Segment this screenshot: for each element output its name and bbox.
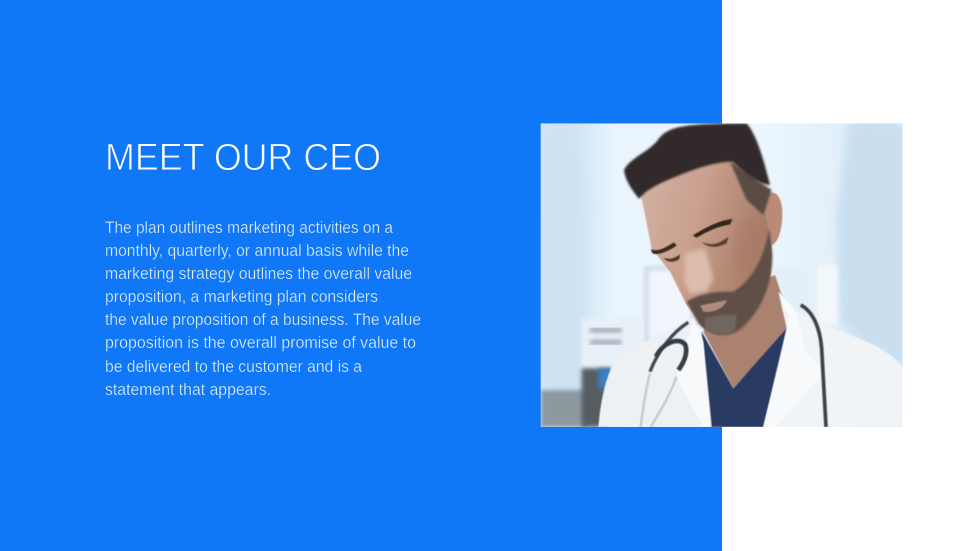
face: [640, 148, 772, 335]
panel: blue background: [0, 0, 722, 551]
lips: [700, 300, 727, 312]
text block: CEO description: monthly, quarterly, or annual basis while the: [105, 242, 409, 260]
chin hair: [705, 315, 737, 335]
text block: CEO description: [105, 219, 421, 399]
neck: [703, 275, 788, 388]
eyebrows and eyes: [651, 219, 733, 262]
lab coat: [598, 292, 903, 427]
text block: CEO description: proposition is the overall promise of value to: [105, 334, 416, 352]
photo background: hospital corridor: [541, 123, 903, 427]
text block: CEO description: statement that appears.: [105, 381, 271, 399]
text block: CEO description: marketing strategy outlines the overall value: [105, 265, 412, 283]
stethoscope: [641, 305, 826, 427]
text block: CEO description: be delivered to the customer and is a: [105, 358, 363, 376]
face shading: [733, 218, 768, 275]
title: MEET OUR CEO: [105, 137, 381, 179]
scrub top: [702, 328, 787, 427]
photo: doctor portrait: [541, 123, 903, 427]
text block: CEO description: the value proposition of a business. The value: [105, 311, 421, 329]
nose: [684, 248, 713, 293]
hair: [624, 123, 770, 199]
hair side fade: [730, 162, 772, 215]
beard: [687, 228, 772, 335]
ear: [763, 193, 782, 246]
text block: CEO description: The plan outlines marketing activities on a: [105, 219, 394, 237]
text block: CEO description: proposition, a marketing plan considers: [105, 288, 378, 306]
